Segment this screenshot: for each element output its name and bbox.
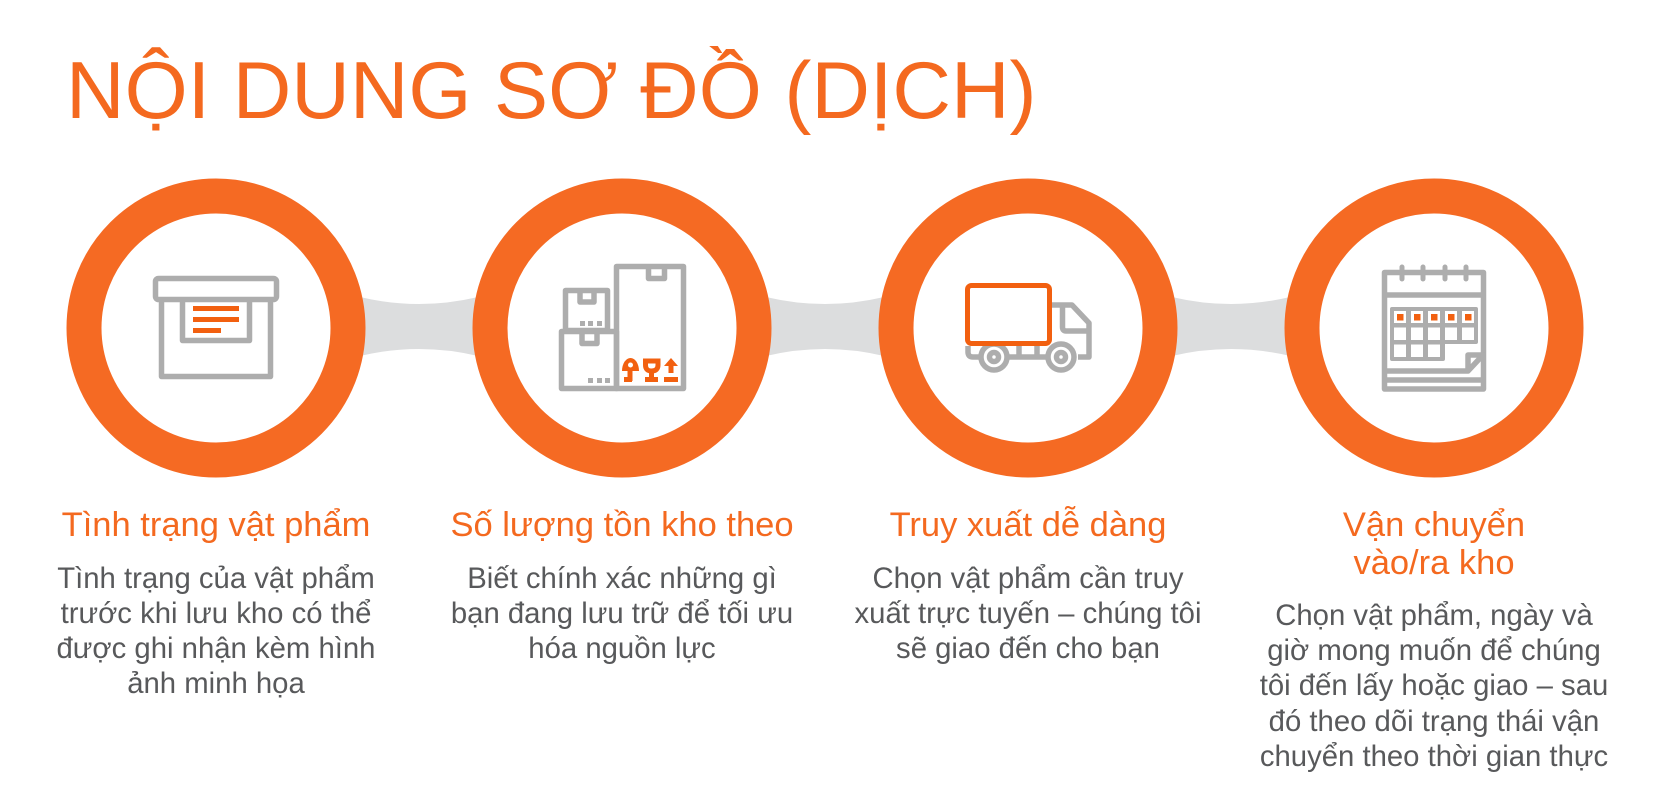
step 1 text: ảnh minh họa xyxy=(127,667,305,700)
step 4 text xyxy=(1260,599,1608,773)
title: NỘI DUNG SƠ ĐỒ (DỊCH) xyxy=(66,45,1037,136)
icon: archive box xyxy=(156,278,276,376)
step 3 text: sẽ giao đến cho bạn xyxy=(896,632,1160,665)
step 4 text: chuyển theo thời gian thực xyxy=(1260,740,1608,773)
step 4 heading xyxy=(1343,506,1525,582)
step 2 text: hóa nguồn lực xyxy=(528,632,716,665)
step 1 text: trước khi lưu kho có thể xyxy=(61,597,371,630)
step 2 text xyxy=(451,562,793,665)
step 4 circle xyxy=(1302,196,1566,460)
step 1 text xyxy=(57,562,375,700)
connectors between circles xyxy=(360,297,1290,356)
step 2 text: bạn đang lưu trữ để tối ưu xyxy=(451,597,793,630)
step 1 circle xyxy=(84,196,348,460)
step 3 text: xuất trực tuyến – chúng tôi xyxy=(855,597,1201,630)
step 1 heading: Tình trạng vật phẩm xyxy=(62,506,370,544)
step 3 circle xyxy=(896,196,1160,460)
icon: delivery truck xyxy=(968,286,1089,370)
step 4 text: tôi đến lấy hoặc giao – sau xyxy=(1260,669,1608,702)
step 2 text: Biết chính xác những gì xyxy=(467,562,777,595)
step 1 text: được ghi nhận kèm hình xyxy=(57,632,375,665)
step 4 heading: vào/ra kho xyxy=(1353,544,1515,582)
step 4 text: giờ mong muốn để chúng xyxy=(1267,634,1601,667)
step 4 text: đó theo dõi trạng thái vận xyxy=(1269,705,1599,738)
step 2 circle xyxy=(490,196,754,460)
icon: stacked boxes xyxy=(562,266,684,388)
step 1 text: Tình trạng của vật phẩm xyxy=(57,562,375,595)
step 4 text: Chọn vật phẩm, ngày và xyxy=(1275,599,1593,632)
step 4 heading: Vận chuyển xyxy=(1343,506,1525,544)
step 3 text: Chọn vật phẩm cần truy xyxy=(872,562,1184,595)
step 3 heading: Truy xuất dễ dàng xyxy=(890,505,1166,544)
step 2 heading: Số lượng tồn kho theo xyxy=(450,506,794,544)
icon: calendar xyxy=(1384,267,1484,389)
step 3 text xyxy=(855,562,1201,665)
